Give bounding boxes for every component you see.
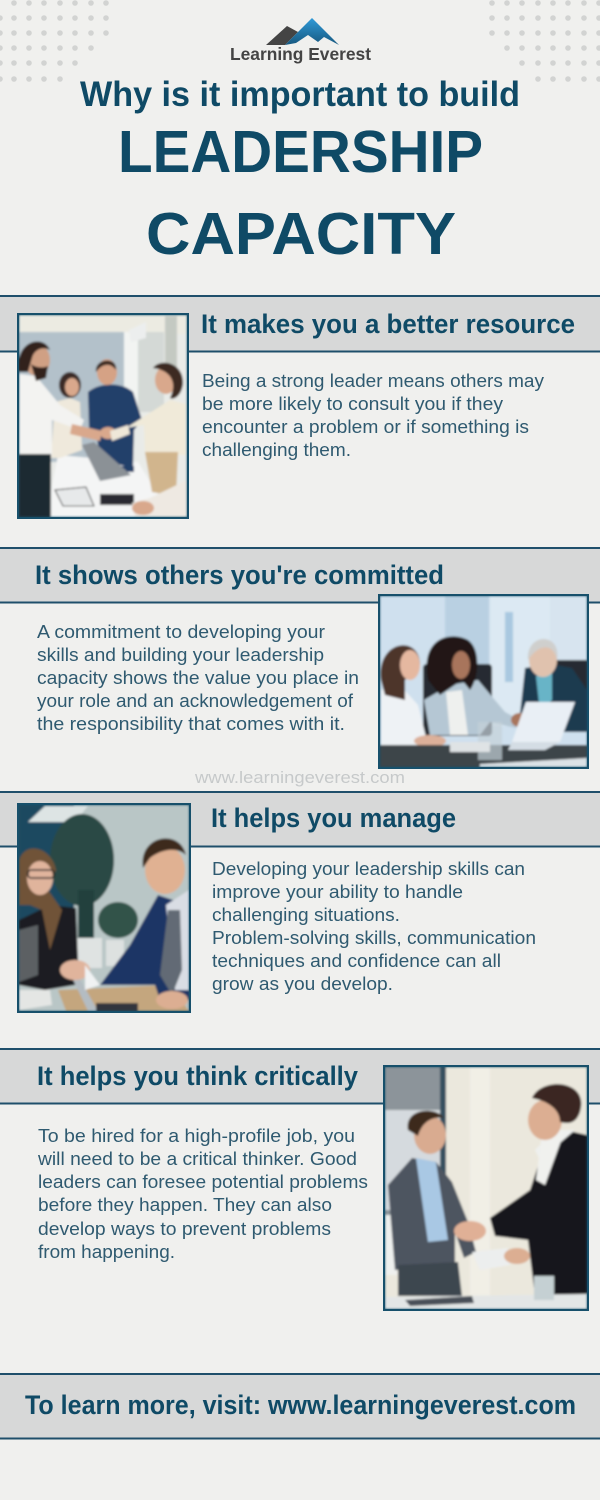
body text: To be hired for a high-profile job, you <box>38 1125 355 1146</box>
body text: Developing your leadership skills can <box>212 858 525 879</box>
body text: Problem-solving skills, communication <box>212 927 536 948</box>
panel: better resource <box>0 295 600 519</box>
body text: capacity shows the value you place in <box>37 667 359 688</box>
photo: handshake across office table <box>17 313 189 519</box>
body text: from happening. <box>38 1241 175 1262</box>
title <box>80 75 520 267</box>
panel: shows commitment <box>0 547 600 769</box>
panel: helps you manage <box>0 791 600 1013</box>
decorative dots: top right <box>489 0 600 82</box>
watermark url: www.learningeverest.com <box>194 768 405 787</box>
footer call to action: To learn more, visit: www.learningeverest.com <box>25 1390 576 1420</box>
title: LEADERSHIP <box>118 119 483 185</box>
panel heading: It makes you a better resource <box>201 309 575 339</box>
logo wordmark: Learning Everest <box>230 44 371 64</box>
photo: smiling man and woman at desk <box>17 803 191 1013</box>
panel: think critically <box>0 1048 600 1311</box>
photo: three women at a meeting table <box>378 594 589 769</box>
body text: before they happen. They can also <box>38 1194 332 1215</box>
body text: your role and an acknowledgement of <box>37 690 354 711</box>
heading band <box>0 791 600 848</box>
body text: Being a strong leader means others may <box>202 370 545 391</box>
body text: leaders can foresee potential problems <box>38 1171 368 1192</box>
footer call to action <box>0 1373 600 1440</box>
body text <box>202 370 545 460</box>
body text: challenging them. <box>202 439 351 460</box>
body text: develop ways to prevent problems <box>38 1218 331 1239</box>
heading band <box>0 547 600 604</box>
body text: be more likely to consult you if they <box>202 393 504 414</box>
panel heading: It helps you manage <box>211 803 456 833</box>
body text <box>37 1125 368 1262</box>
icon: mountain peaks <box>266 18 339 45</box>
title: CAPACITY <box>146 201 456 267</box>
body text: A commitment to developing your <box>37 621 325 642</box>
body text: grow as you develop. <box>212 973 393 994</box>
panel heading: It shows others you're committed <box>35 560 444 590</box>
body text <box>37 621 359 734</box>
body text: will need to be a critical thinker. Good <box>37 1148 357 1169</box>
body text: techniques and confidence can all <box>212 950 501 971</box>
body text: encounter a problem or if something is <box>202 416 529 437</box>
logo: Learning Everest <box>230 18 371 64</box>
heading band <box>0 295 600 352</box>
title: Why is it important to build <box>80 75 520 114</box>
decorative dots: top left <box>0 0 109 82</box>
photo: two businessmen shaking hands <box>383 1065 589 1311</box>
panel heading: It helps you think critically <box>37 1061 358 1091</box>
body text: the responsibility that comes with it. <box>37 713 345 734</box>
body text <box>212 858 536 994</box>
body text: improve your ability to handle <box>212 881 463 902</box>
body text: skills and building your leadership <box>37 644 324 665</box>
heading band <box>0 1048 600 1104</box>
body text: challenging situations. <box>212 904 400 925</box>
